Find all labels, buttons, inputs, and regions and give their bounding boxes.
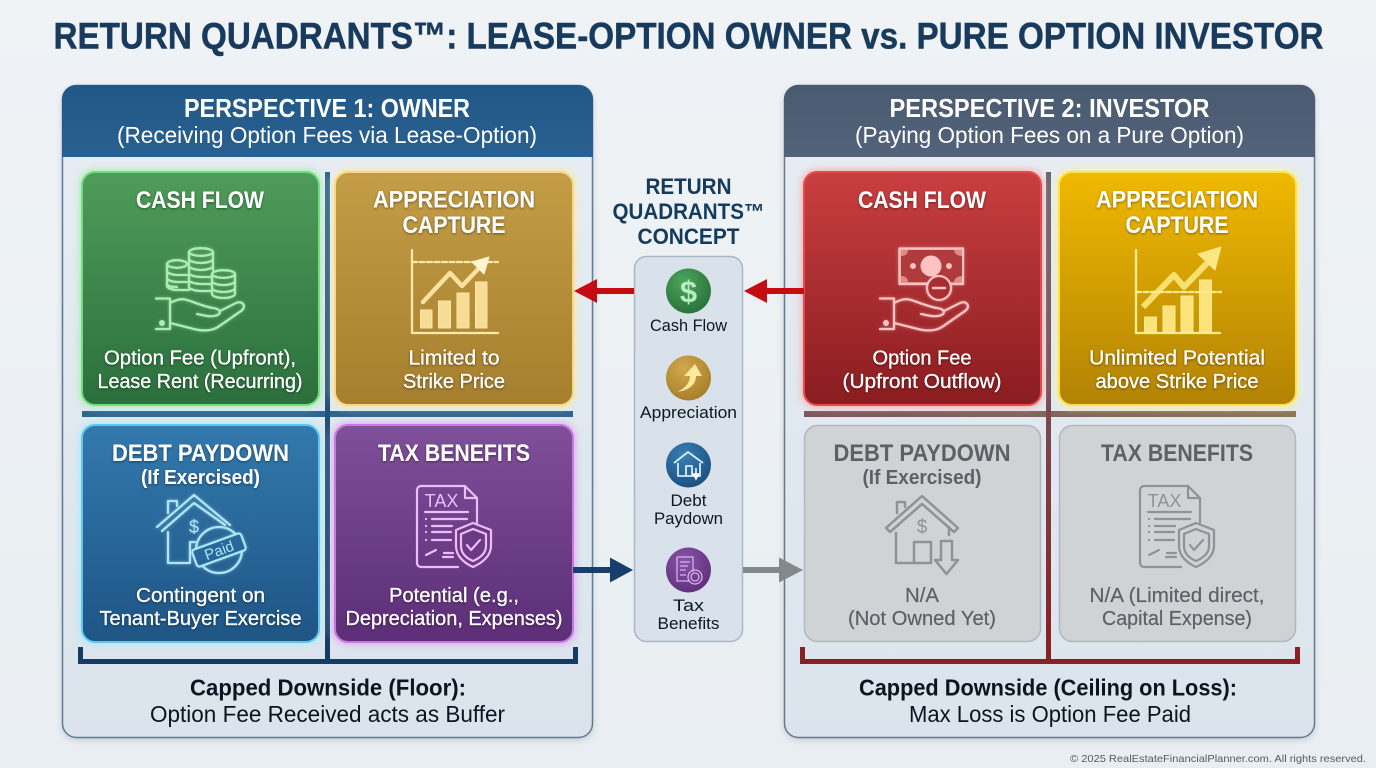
quadrant: owner tax benefits bbox=[333, 423, 575, 644]
quadrant: owner cash flow: Lease Rent (Recurring) bbox=[98, 371, 302, 393]
quadrant: investor appreciation capture: CAPTURE bbox=[1126, 212, 1228, 239]
quadrant: investor cash flow: CASH FLOW bbox=[858, 187, 986, 214]
quadrant: investor cash flow: Option Fee bbox=[872, 348, 972, 370]
center concept heading bbox=[612, 174, 764, 249]
legend: tax benefits: Benefits bbox=[658, 614, 720, 633]
quadrant: investor debt paydown not applicable: N/A bbox=[905, 585, 940, 607]
quadrant: owner tax benefits: TAX BENEFITS bbox=[378, 440, 530, 467]
owner heading: PERSPECTIVE 1: OWNER bbox=[184, 93, 470, 123]
quadrant: owner debt paydown bbox=[80, 423, 321, 644]
icon: house with paid stamp: Paid bbox=[202, 538, 236, 564]
quadrant: owner cash flow: Option Fee (Upfront), bbox=[104, 348, 296, 370]
legend: debt paydown bbox=[654, 442, 723, 528]
quadrant: investor tax benefits not applicable bbox=[1060, 426, 1296, 642]
arrow: investor cash flow to legend bbox=[744, 279, 804, 303]
arrow: legend to investor tax bbox=[743, 558, 803, 582]
center concept heading: QUADRANTS™ bbox=[612, 199, 764, 224]
arrow: owner tax to legend bbox=[573, 558, 633, 582]
arrow: legend to owner appreciation bbox=[574, 279, 634, 303]
legend: tax benefits: Tax bbox=[673, 596, 705, 615]
investor downside summary bbox=[859, 674, 1237, 727]
quadrant: owner appreciation capture: APPRECIATION bbox=[373, 186, 535, 214]
quadrant: owner appreciation capture: Strike Price bbox=[403, 371, 505, 393]
icon: house with paid stamp bbox=[157, 495, 247, 573]
owner subheading: (Receiving Option Fees via Lease-Option) bbox=[117, 122, 537, 148]
icon: gray tax document with shield bbox=[1140, 486, 1214, 567]
quadrant: owner tax benefits: Depreciation, Expenses) bbox=[346, 608, 562, 630]
owner downside summary: Option Fee Received acts as Buffer bbox=[150, 701, 505, 727]
panel: investor perspective bbox=[784, 85, 1315, 738]
panel: owner perspective bbox=[62, 85, 593, 738]
investor downside summary: Max Loss is Option Fee Paid bbox=[909, 701, 1191, 727]
legend: debt paydown: Paydown bbox=[654, 509, 723, 528]
icon: tax document with shield: TAX bbox=[425, 491, 458, 511]
quadrant: investor debt paydown not applicable: (Not Owned Yet) bbox=[848, 608, 996, 630]
icon: bill and hand bbox=[880, 248, 968, 330]
quadrant: owner cash flow bbox=[80, 170, 321, 407]
quadrant: owner debt paydown: DEBT PAYDOWN bbox=[112, 440, 289, 467]
icon: house with down arrow: $ bbox=[917, 517, 928, 538]
quadrant: investor appreciation capture: above Strike Price bbox=[1096, 371, 1258, 393]
quadrant: investor appreciation capture bbox=[1057, 170, 1298, 407]
quadrant: investor tax benefits not applicable: N/A (Limited direct, bbox=[1090, 585, 1264, 607]
quadrant: investor debt paydown not applicable: DEBT PAYDOWN bbox=[834, 440, 1010, 467]
quadrant: investor debt paydown not applicable bbox=[804, 426, 1040, 642]
quadrant: owner debt paydown: Tenant-Buyer Exercise bbox=[100, 608, 302, 630]
investor header band bbox=[784, 85, 1315, 157]
legend: debt paydown: Debt bbox=[670, 491, 707, 510]
quadrant: owner debt paydown: Contingent on bbox=[136, 585, 265, 607]
legend: cash flow: Cash Flow bbox=[650, 316, 728, 335]
quadrant: investor debt paydown not applicable: (If Exercised) bbox=[862, 467, 982, 489]
investor subheading: (Paying Option Fees on a Pure Option) bbox=[855, 122, 1244, 148]
quadrant: investor appreciation capture: APPRECIATION bbox=[1096, 186, 1258, 214]
center concept heading: RETURN bbox=[646, 174, 732, 199]
quadrant: owner appreciation capture bbox=[333, 170, 575, 407]
legend: appreciation: Appreciation bbox=[640, 403, 737, 422]
copyright footer: © 2025 RealEstateFinancialPlanner.com. All rights reserved. bbox=[1070, 753, 1366, 765]
investor heading: PERSPECTIVE 2: INVESTOR bbox=[890, 93, 1210, 123]
quadrant: owner tax benefits: Potential (e.g., bbox=[389, 585, 519, 607]
owner header band bbox=[62, 85, 593, 157]
owner downside summary bbox=[150, 674, 505, 727]
owner floor bracket bbox=[80, 647, 576, 662]
icon: house with paid stamp: $ bbox=[189, 517, 199, 537]
owner downside summary: Capped Downside (Floor): bbox=[190, 674, 466, 700]
icon: house with down arrow bbox=[886, 496, 958, 574]
icon: tax document with shield bbox=[417, 486, 491, 567]
quadrant: owner debt paydown: (If Exercised) bbox=[141, 467, 260, 489]
legend: tax benefits bbox=[658, 548, 720, 633]
investor ceiling bracket bbox=[802, 647, 1298, 662]
center concept legend bbox=[634, 256, 742, 642]
quadrant: investor cash flow bbox=[802, 170, 1043, 407]
legend: cash flow: $ bbox=[680, 274, 697, 309]
investor downside summary: Capped Downside (Ceiling on Loss): bbox=[859, 674, 1237, 700]
icon: gray tax document with shield: TAX bbox=[1148, 491, 1181, 511]
icon: uncapped growth chart bbox=[1136, 247, 1221, 333]
icon: coins in hand bbox=[156, 248, 244, 330]
quadrant: investor appreciation capture: Unlimited Potential bbox=[1089, 348, 1265, 370]
quadrant: investor cash flow: (Upfront Outflow) bbox=[842, 371, 1002, 393]
legend: cash flow bbox=[650, 268, 728, 335]
quadrant: investor tax benefits not applicable: Capital Expense) bbox=[1102, 608, 1252, 630]
center concept heading: CONCEPT bbox=[638, 224, 740, 249]
legend: appreciation bbox=[640, 356, 737, 422]
quadrant: owner cash flow: CASH FLOW bbox=[136, 187, 264, 214]
icon: capped growth chart bbox=[412, 250, 498, 333]
quadrant: owner appreciation capture: Limited to bbox=[408, 348, 500, 370]
quadrant: investor tax benefits not applicable: TAX BENEFITS bbox=[1101, 440, 1253, 467]
quadrant: owner appreciation capture: CAPTURE bbox=[402, 212, 506, 239]
